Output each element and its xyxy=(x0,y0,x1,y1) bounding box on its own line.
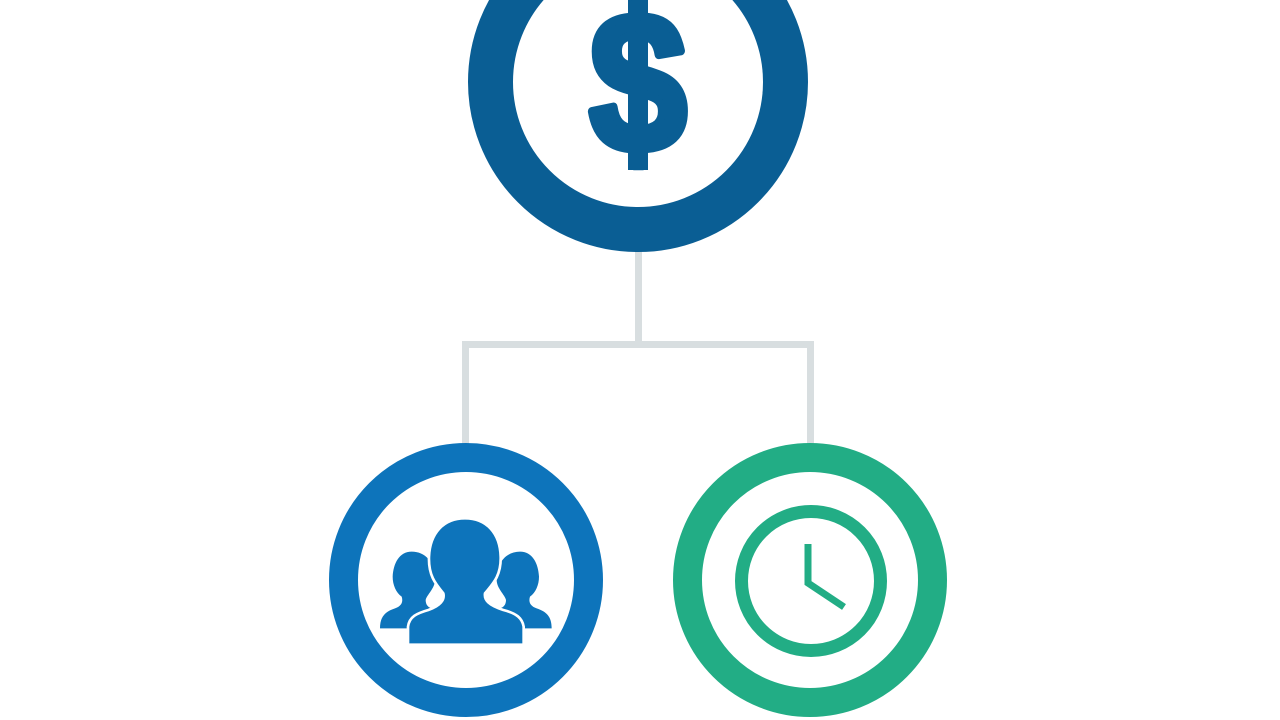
icon: clock xyxy=(742,512,880,650)
icon: people group xyxy=(380,518,552,645)
left node: people xyxy=(344,458,588,702)
connector lines xyxy=(462,250,814,447)
dollar ring xyxy=(490,0,786,230)
clock ring xyxy=(688,458,932,702)
people ring xyxy=(344,458,588,702)
right node: clock xyxy=(688,458,932,702)
top node: dollar xyxy=(490,0,786,230)
